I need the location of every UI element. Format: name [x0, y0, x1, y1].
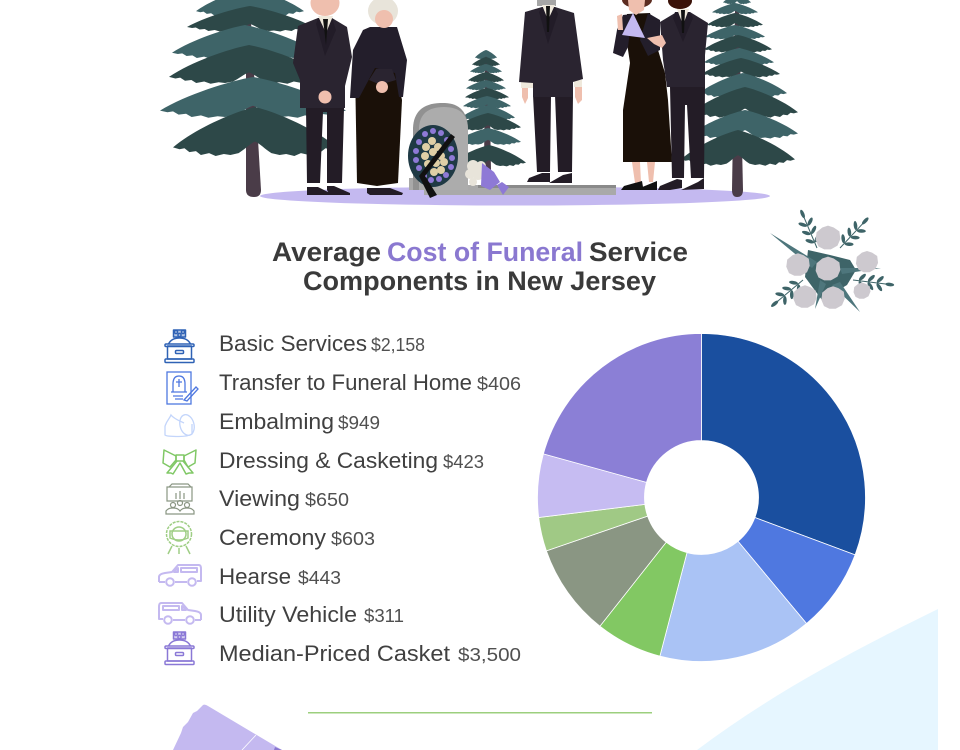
row: embalming: Embalming	[219, 409, 334, 434]
row: embalming: $949	[338, 413, 380, 433]
title: Average	[272, 237, 381, 267]
illustration: elderly man	[293, 0, 352, 195]
donut chart	[537, 334, 865, 661]
illustration: mourning woman	[613, 0, 672, 190]
row: dressing and casketing: Dressing & Casketing	[219, 448, 438, 473]
row: ceremony: Ceremony	[219, 525, 326, 550]
row: utility vehicle	[159, 602, 404, 627]
row: ceremony	[166, 522, 375, 554]
illustration: bouquet	[465, 160, 509, 195]
list: cost components	[159, 330, 521, 666]
ground ellipse	[260, 186, 770, 206]
row: hearse	[159, 564, 341, 589]
row: viewing: $650	[305, 490, 349, 510]
illustration: left pine tree	[160, 0, 346, 197]
illustration: tombstone and slab	[409, 103, 616, 195]
row: viewing: Viewing	[219, 486, 300, 511]
row: hearse: $443	[298, 568, 341, 588]
row: embalming	[165, 409, 380, 437]
illustration: wreath	[408, 125, 458, 198]
row: transfer to funeral home	[167, 370, 521, 404]
divider line	[308, 712, 652, 714]
illustration: comforting man	[647, 0, 708, 190]
icon: floral bouquet	[766, 206, 895, 313]
title: Components in New Jersey	[303, 266, 656, 296]
row: median-priced casket	[165, 632, 521, 666]
illustration: man in suit	[519, 0, 583, 183]
row: basic services: Basic Services	[219, 331, 367, 356]
map fragment: New Jersey	[173, 705, 282, 750]
illustration: small pine tree	[452, 50, 526, 170]
row: ceremony: $603	[331, 529, 375, 549]
title: Cost of Funeral	[387, 237, 583, 267]
background shape: light blue curve	[697, 609, 938, 750]
row: median-priced casket: $3,500	[458, 645, 521, 665]
row: viewing	[166, 484, 349, 514]
row: utility vehicle: $311	[364, 606, 404, 626]
illustration: elderly woman	[350, 0, 407, 195]
row: transfer to funeral home: $406	[477, 374, 521, 394]
row: dressing and casketing: $423	[443, 452, 484, 472]
row: dressing and casketing	[163, 448, 484, 474]
row: transfer to funeral home: Transfer to Funeral Home	[219, 370, 472, 395]
row: hearse: Hearse	[219, 564, 291, 589]
row: median-priced casket: Median-Priced Casket	[219, 641, 450, 666]
illustration: right pine tree	[681, 0, 798, 197]
row: basic services	[165, 330, 425, 362]
row: basic services: $2,158	[371, 335, 425, 355]
title	[272, 237, 688, 296]
row: utility vehicle: Utility Vehicle	[219, 602, 357, 627]
title: Service	[589, 237, 688, 267]
